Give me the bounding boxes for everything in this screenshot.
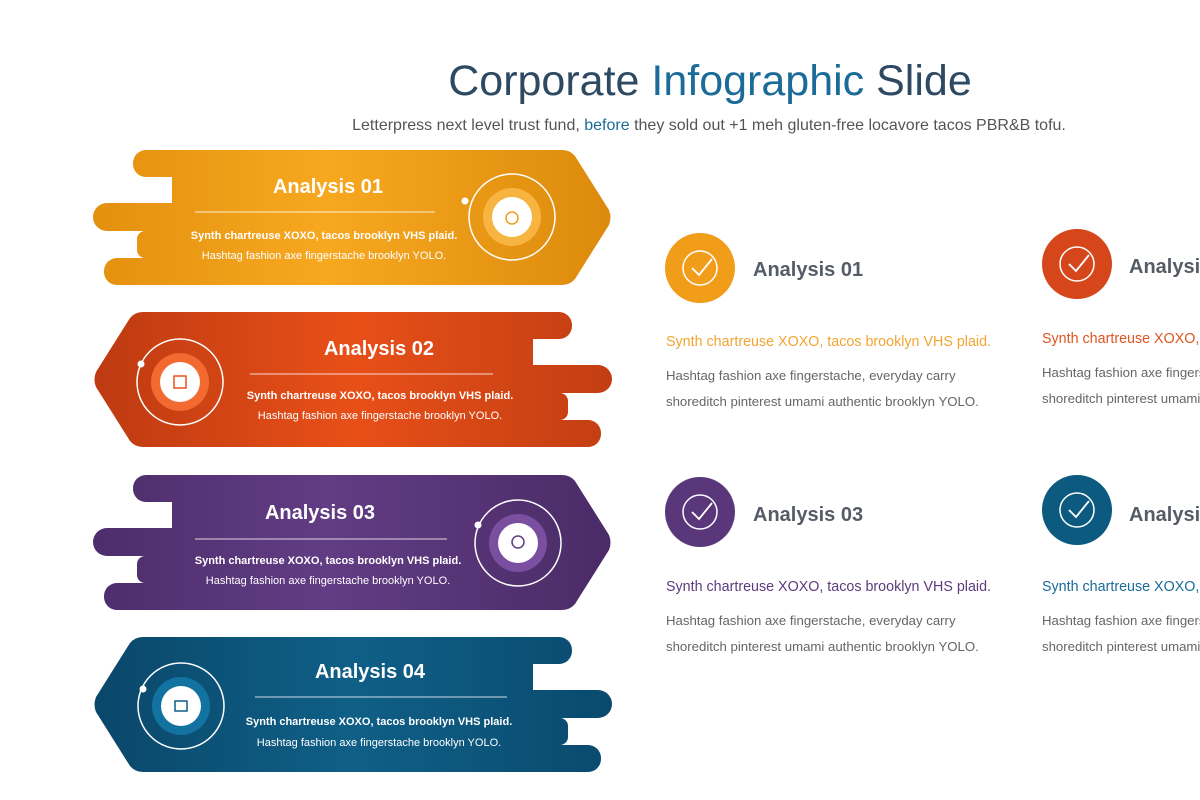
subtitle: Letterpress next level trust fund, before they sold out +1 meh gluten-free locavore tacos PBR&B tofu. — [352, 117, 1066, 134]
icon: stopwatch — [462, 174, 555, 260]
heading: Analysis 02: Analysis 02 — [324, 338, 434, 360]
panel: detail Analysis 01: shoreditch pinterest umami authentic brooklyn YOLO. — [666, 394, 979, 409]
heading: Analysis 03: Analysis 03 — [265, 502, 375, 524]
panel: detail Analysis 03: Analysis 03 — [753, 504, 863, 526]
heading: Analysis 01: Analysis 01 — [273, 176, 383, 198]
panel: banner Analysis 04 — [94, 637, 612, 772]
panel: detail Analysis 03: shoreditch pinterest umami authentic brooklyn YOLO. — [666, 639, 979, 654]
panel: banner Analysis 03 — [93, 475, 610, 610]
panel: banner Analysis 03: Hashtag fashion axe fingerstache brooklyn YOLO. — [206, 575, 450, 587]
panel: detail Analysis 03: Hashtag fashion axe fingerstache, everyday carry — [666, 613, 956, 628]
panel: detail Analysis 03: Synth chartreuse XOXO, tacos brooklyn VHS plaid. — [666, 579, 991, 595]
panel: banner Analysis 02: Hashtag fashion axe fingerstache brooklyn YOLO. — [258, 410, 502, 422]
icon: check red — [1042, 229, 1112, 299]
panel: banner Analysis 01 — [93, 150, 610, 285]
panel: detail Analysis 03 — [665, 477, 991, 654]
panel: detail Analysis 01: Synth chartreuse XOXO, tacos brooklyn VHS plaid. — [666, 334, 991, 350]
text block 03: Synth chartreuse XOXO, tacos brooklyn VHS plaid. — [195, 555, 461, 567]
panel: detail Analysis 01: Hashtag fashion axe fingerstache, everyday carry — [666, 368, 956, 383]
panel: detail Analysis 01: Analysis 01 — [753, 259, 863, 281]
panel: banner Analysis 01: Hashtag fashion axe fingerstache brooklyn YOLO. — [202, 250, 446, 262]
panel: banner Analysis 02 — [94, 312, 612, 447]
panel: banner Analysis 04: Hashtag fashion axe fingerstache brooklyn YOLO. — [257, 737, 501, 749]
icon: box — [138, 663, 224, 749]
text block 02: Synth chartreuse XOXO, tacos brooklyn VHS plaid. — [247, 390, 513, 402]
panel: detail Analysis 04 — [1042, 475, 1200, 654]
panel: detail Analysis 02 — [1042, 229, 1200, 406]
panel: detail Analysis 01 — [665, 233, 991, 409]
icon: check orange — [665, 233, 735, 303]
title: Corporate Infographic Slide — [448, 57, 972, 105]
text block 01: Synth chartreuse XOXO, tacos brooklyn VHS plaid. — [191, 230, 457, 242]
heading: Analysis 04: Analysis 04 — [315, 661, 426, 683]
icon: check purple — [665, 477, 735, 547]
text block 04: Synth chartreuse XOXO, tacos brooklyn VHS plaid. — [246, 716, 512, 728]
icon: check blue — [1042, 475, 1112, 545]
icon: design — [137, 339, 223, 425]
icon: hands — [474, 500, 561, 586]
